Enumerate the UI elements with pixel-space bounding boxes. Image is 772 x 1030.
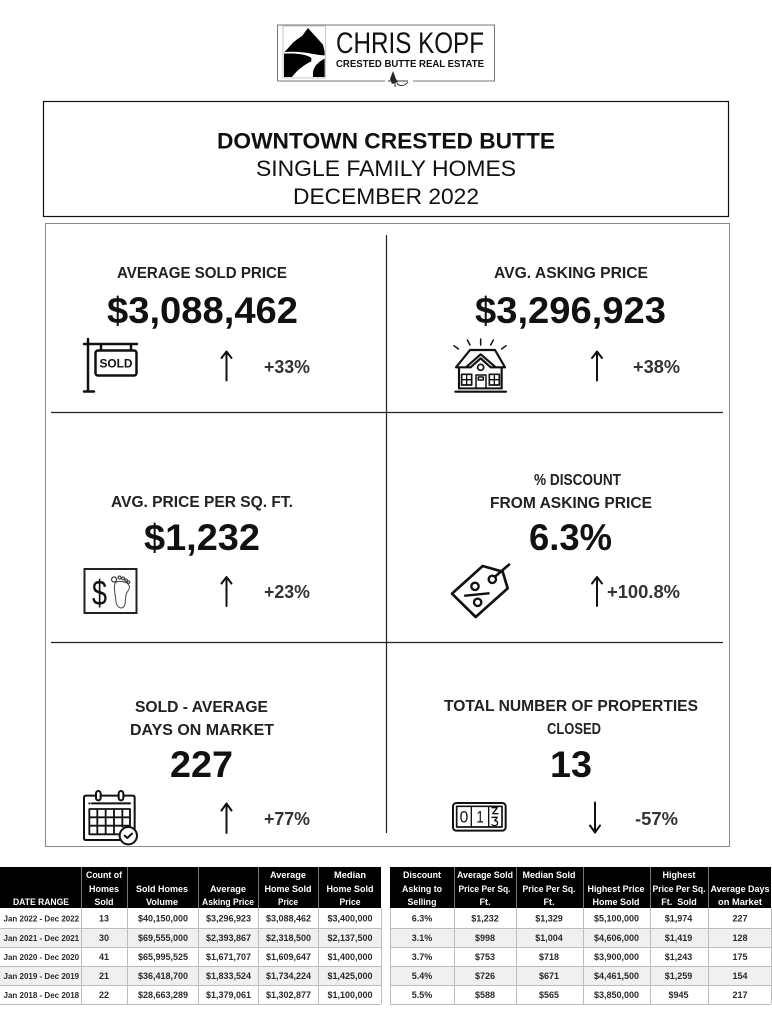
row: 2019: 154 — [732, 971, 748, 981]
row: 2020: Jan 2020 - Dec 2020 — [4, 953, 80, 962]
row: 2022: 13 — [99, 914, 109, 924]
row: 2020: 41 — [99, 952, 109, 962]
arrow down — [590, 802, 600, 832]
title line 1: DOWNTOWN CRESTED BUTTE — [217, 128, 555, 154]
row: 2020: $1,609,647 — [266, 952, 311, 962]
panel: percent discount from asking price — [452, 472, 680, 617]
table header: Ft. — [544, 897, 554, 907]
panel: sold average days on market: DAYS ON MARKET — [130, 722, 274, 739]
row: 2022: 227 — [732, 914, 748, 924]
icon: sold sign: SOLD — [100, 358, 132, 370]
row: 2022: $3,088,462 — [266, 914, 311, 924]
row: 2021: Jan 2021 - Dec 2021 — [4, 934, 80, 943]
row: 2018: $3,850,000 — [594, 990, 639, 1000]
panel: average price per square foot: AVG. PRICE PER SQ. FT. — [111, 494, 293, 511]
change: -57%: -57% — [635, 809, 678, 829]
logo name: CHRIS KOPF — [336, 27, 484, 60]
row: 2021: $1,419 — [665, 933, 692, 943]
table header: Average — [210, 884, 246, 894]
table header: Price Per Sq. — [458, 884, 510, 894]
row: 2018: 217 — [732, 990, 748, 1000]
table header: Price Per Sq. — [652, 884, 706, 894]
change: +23%: +23% — [264, 582, 310, 602]
panel: sold average days on market — [84, 699, 310, 844]
panel: average price per square foot: $1,232 — [144, 517, 260, 558]
row: 2022: $1,329 — [535, 914, 563, 924]
icon: house — [454, 339, 506, 392]
table header: DATE RANGE — [13, 897, 69, 907]
panel: percent discount from asking price: % DISCOUNT — [534, 472, 621, 489]
icon: dollar and footprint: $ — [92, 574, 107, 613]
panel: average asking price: AVG. ASKING PRICE — [494, 265, 648, 282]
table header: Selling — [408, 897, 436, 907]
row: 2020: $1,243 — [665, 952, 692, 962]
row: 2022 — [4, 914, 373, 924]
row: 2022: Jan 2022 - Dec 2022 — [4, 914, 80, 924]
table: discount, price per square foot and days on market by year — [390, 867, 772, 1004]
row: 2019: $1,425,000 — [327, 971, 373, 981]
table header: Average Days — [710, 884, 770, 894]
table header: on Market — [718, 897, 762, 907]
row: 2018 — [412, 990, 748, 1000]
row: 2018: 5.5% — [412, 990, 432, 1000]
table header: Median — [334, 870, 366, 880]
table header: Sold Homes — [136, 884, 188, 894]
row: 2020 — [4, 952, 373, 962]
row: 2018 — [4, 990, 373, 1000]
panel: percent discount from asking price: FROM ASKING PRICE — [490, 495, 652, 512]
table header: Asking to — [402, 884, 442, 894]
table header: Ft. Sold — [661, 897, 697, 907]
row: 2019: $4,461,500 — [594, 971, 639, 981]
title line 2: SINGLE FAMILY HOMES — [256, 156, 516, 181]
row: 2021: $1,004 — [535, 933, 563, 943]
row: 2020: 175 — [732, 952, 748, 962]
table header: Price — [278, 897, 298, 907]
table header: Average Sold — [457, 870, 513, 880]
table header: Median Sold — [522, 870, 576, 880]
row: 2020: $1,400,000 — [327, 952, 373, 962]
panel: average asking price — [454, 265, 680, 392]
panel: total number of properties closed: TOTAL NUMBER OF PROPERTIES — [444, 698, 698, 715]
row: 2018: $28,663,289 — [138, 990, 188, 1000]
row: 2019: 21 — [99, 971, 109, 981]
icon: sold sign — [84, 339, 137, 392]
row: 2020: $1,671,707 — [206, 952, 251, 962]
panel: average sold price: AVERAGE SOLD PRICE — [117, 265, 287, 282]
arrow up — [222, 352, 232, 380]
row: 2020: $718 — [539, 952, 559, 962]
panel: percent discount from asking price: 6.3% — [529, 517, 612, 558]
row: 2019: 5.4% — [412, 971, 432, 981]
row: 2021: 30 — [99, 933, 109, 943]
row: 2020: 3.7% — [412, 952, 432, 962]
change: +38%: +38% — [633, 357, 680, 377]
row: 2021: $69,555,000 — [138, 933, 188, 943]
row: 2019 — [4, 971, 373, 981]
row: 2019 — [412, 971, 748, 981]
table header: Count of — [86, 870, 123, 880]
row: 2022: $40,150,000 — [138, 914, 188, 924]
panel: total number of properties closed — [444, 698, 698, 832]
row: 2021 — [4, 933, 373, 943]
table header: Ft. — [480, 897, 490, 907]
row: 2021: $2,318,500 — [266, 933, 311, 943]
row: 2022: $3,400,000 — [327, 914, 373, 924]
change: +77%: +77% — [264, 809, 310, 829]
icon: discount tag — [452, 565, 509, 617]
row: 2022: 6.3% — [412, 914, 432, 924]
row: 2019: $726 — [475, 971, 495, 981]
row: 2020: $65,995,525 — [138, 952, 188, 962]
row: 2021: $2,393,867 — [206, 933, 251, 943]
arrow up — [592, 352, 602, 380]
panel: total number of properties closed: CLOSED — [547, 721, 601, 738]
table header: Discount — [403, 870, 441, 880]
row: 2020: $3,900,000 — [594, 952, 639, 962]
table header: Price Per Sq. — [522, 884, 576, 894]
table header: Price — [340, 897, 360, 907]
table header: Highest Price — [588, 884, 644, 894]
panel: sold average days on market: 227 — [170, 744, 233, 785]
table header — [13, 870, 374, 907]
table: sales volume and prices by year — [0, 867, 382, 1004]
table header: Highest — [662, 870, 696, 880]
row: 2019: $1,833,524 — [206, 971, 251, 981]
row: 2021: $998 — [475, 933, 495, 943]
panel: sold average days on market: SOLD - AVERAGE — [135, 699, 268, 716]
row: 2022: $3,296,923 — [206, 914, 251, 924]
row: 2019: $671 — [539, 971, 559, 981]
table header: Volume — [146, 897, 178, 907]
icon: dollar and footprint — [84, 569, 136, 613]
arrow up — [592, 577, 602, 606]
row: 2019: $1,259 — [665, 971, 692, 981]
table header: Home Sold — [264, 884, 312, 894]
panel: total number of properties closed: 13 — [550, 744, 592, 785]
row: 2018: $1,379,061 — [206, 990, 251, 1000]
row: 2019: Jan 2019 - Dec 2019 — [4, 972, 80, 981]
change: +100.8%: +100.8% — [607, 582, 680, 602]
row: 2018: $1,100,000 — [327, 990, 373, 1000]
icon: number counter — [453, 803, 506, 831]
row: 2019: $36,418,700 — [138, 971, 188, 981]
row: 2018: $1,302,877 — [266, 990, 311, 1000]
panel: average price per square foot — [84, 494, 310, 613]
row: 2022: $5,100,000 — [594, 914, 639, 924]
table header: Home Sold — [326, 884, 374, 894]
table header: Asking Price — [202, 897, 254, 907]
table header: Sold — [94, 897, 114, 907]
row: 2019: $1,734,224 — [266, 971, 311, 981]
panel: average sold price — [84, 265, 310, 392]
panel: average asking price: $3,296,923 — [475, 290, 666, 331]
row: 2021: $2,137,500 — [327, 933, 373, 943]
table header — [402, 870, 770, 907]
table header: Average — [270, 870, 306, 880]
icon: mountain and river mark — [283, 26, 325, 78]
change: +33%: +33% — [264, 357, 310, 377]
row: 2020: $753 — [475, 952, 495, 962]
row: 2018: 22 — [99, 990, 109, 1000]
arrow up — [222, 804, 232, 833]
arrow up — [222, 577, 232, 606]
row: 2021: 128 — [732, 933, 748, 943]
icon: fly — [388, 71, 408, 87]
icon: number counter: 0 — [460, 808, 468, 827]
title box — [44, 102, 728, 216]
row: 2021: 3.1% — [412, 933, 432, 943]
logo tagline: CRESTED BUTTE REAL ESTATE — [336, 59, 484, 70]
row: 2021 — [412, 933, 748, 943]
stats panel — [46, 224, 730, 846]
row: 2018: $945 — [668, 990, 689, 1000]
table header: Home Sold — [592, 897, 640, 907]
row: 2022: $1,232 — [471, 914, 499, 924]
panel: average sold price: $3,088,462 — [107, 290, 298, 331]
row: 2018: $565 — [539, 990, 559, 1000]
logo: Chris Kopf Crested Butte Real Estate — [278, 25, 494, 87]
row: 2022 — [412, 914, 748, 924]
row: 2022: $1,974 — [665, 914, 692, 924]
row: 2020 — [412, 952, 748, 962]
table header: Homes — [89, 884, 119, 894]
title line 3: DECEMBER 2022 — [293, 184, 479, 209]
row: 2018: $588 — [475, 990, 495, 1000]
row: 2021: $4,606,000 — [594, 933, 639, 943]
row: 2018: Jan 2018 - Dec 2018 — [4, 991, 80, 1000]
icon: calendar with check — [84, 791, 137, 844]
icon: number counter: 1 — [476, 808, 484, 827]
